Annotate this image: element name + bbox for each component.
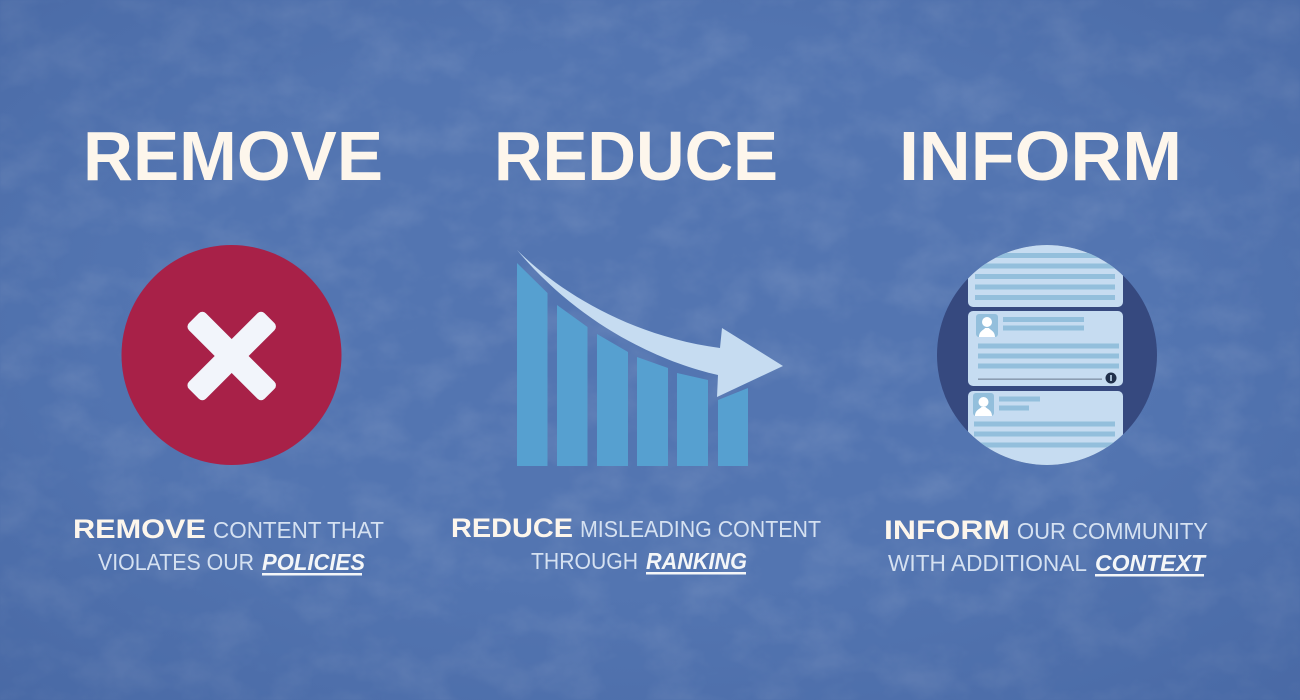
caption: remove xyxy=(73,514,384,576)
caption: remove: POLICIES xyxy=(262,549,366,575)
caption: reduce: RANKING xyxy=(646,548,747,574)
feed post: middle card with info icon xyxy=(968,311,1123,386)
caption: reduce: REDUCE xyxy=(451,513,573,543)
caption: reduce: THROUGH xyxy=(531,548,638,574)
caption: remove: REMOVE xyxy=(73,514,206,544)
heading: INFORM: INFORM xyxy=(899,117,1182,195)
caption: remove: VIOLATES OUR xyxy=(98,549,254,575)
icon: red circle with white X xyxy=(122,245,342,465)
caption: inform xyxy=(884,515,1208,576)
caption: remove: CONTENT THAT xyxy=(213,517,384,543)
feed post: top card xyxy=(968,245,1123,307)
curved arrow xyxy=(517,250,783,397)
caption: inform: OUR COMMUNITY xyxy=(1017,518,1208,544)
heading: REDUCE: REDUCE xyxy=(494,117,778,195)
icon: news feed posts in a circle xyxy=(937,245,1157,465)
caption: inform: WITH ADDITIONAL xyxy=(888,550,1087,576)
feed post: bottom card xyxy=(968,391,1123,465)
heading: REMOVE: REMOVE xyxy=(83,117,383,195)
caption: reduce: MISLEADING CONTENT xyxy=(580,516,821,542)
chart: declining bars with downward arrow xyxy=(517,250,783,466)
caption: reduce xyxy=(451,513,821,574)
caption: inform: INFORM xyxy=(884,515,1010,545)
declining bars xyxy=(517,263,748,466)
caption: inform: CONTEXT xyxy=(1095,550,1207,576)
